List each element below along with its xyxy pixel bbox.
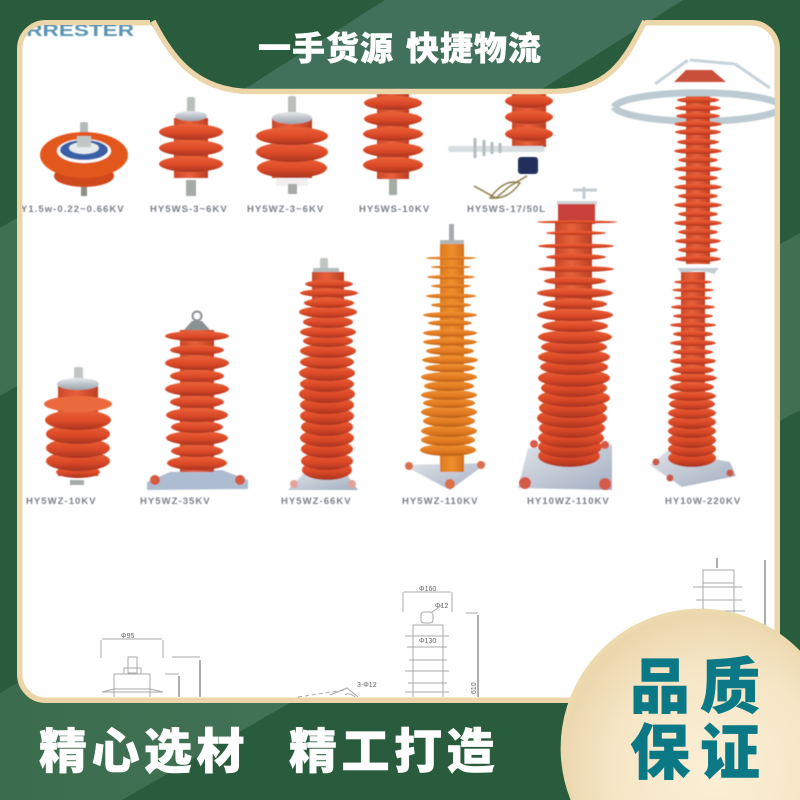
arrester: HY5WS-17/50L	[448, 92, 553, 198]
arrester: HY5WZ-3~6KV	[256, 96, 328, 194]
label: Y1.5w-0.22~0.66KV	[21, 204, 125, 215]
arrester: HY5WZ-66KV	[288, 258, 358, 490]
technical drawing: small arrester	[101, 633, 200, 697]
quality badge	[563, 611, 800, 800]
bottom slogan left: 精心选材	[39, 726, 249, 779]
arrester: HY10W-220KV with grading ring	[614, 60, 783, 487]
technical drawing: mid arrester: 610	[471, 682, 478, 694]
bottom slogan right: 精工打造	[289, 726, 499, 779]
product photos	[10, 22, 783, 507]
label: HY5WZ-110KV	[402, 496, 478, 507]
label: HY5WZ-35KV	[140, 496, 211, 507]
technical drawing: mid arrester: Φ12	[435, 603, 448, 610]
label: HY5WS-3~6KV	[150, 204, 228, 215]
arrester: HY5WZ-110KV orange	[403, 224, 487, 490]
arrester: HY1.5W dome	[40, 122, 128, 196]
label: HY5WS-17/50L	[467, 204, 546, 215]
badge text line 2: 保证	[630, 720, 770, 787]
label: HY5WZ-3~6KV	[247, 204, 324, 215]
header title second phrase: 快捷物流	[406, 30, 542, 67]
label: HY5WZ-66KV	[281, 496, 352, 507]
technical drawing: base outline: 3-Φ12	[357, 682, 377, 689]
brand text fragment: ARRESTER	[10, 22, 134, 40]
arrester: HY5WZ-10KV	[44, 367, 112, 485]
technical drawing: base outline	[298, 682, 377, 697]
arrester: HY10WZ-110KV	[518, 187, 617, 490]
label: HY5WZ-10KV	[26, 496, 97, 507]
technical drawing: small arrester: Φ95	[121, 633, 134, 640]
technical drawing: large arrester	[693, 558, 766, 625]
technical drawing: mid arrester	[403, 586, 478, 697]
header tab	[150, 20, 646, 94]
label: HY5WS-10KV	[359, 204, 430, 215]
arrester: HY5WZ-35KV	[147, 312, 248, 490]
label: HY10W-220KV	[665, 496, 741, 507]
label: HY10WZ-110KV	[527, 496, 610, 507]
arrester: HY5WS-3~6KV	[159, 97, 223, 196]
arrester: HY5WS-10KV	[363, 92, 423, 195]
technical drawing: mid arrester: Φ160	[419, 586, 436, 593]
badge text line 1: 品质	[630, 654, 770, 721]
header title: 一手货源	[258, 30, 394, 67]
technical drawing: mid arrester: Φ130	[419, 638, 436, 645]
